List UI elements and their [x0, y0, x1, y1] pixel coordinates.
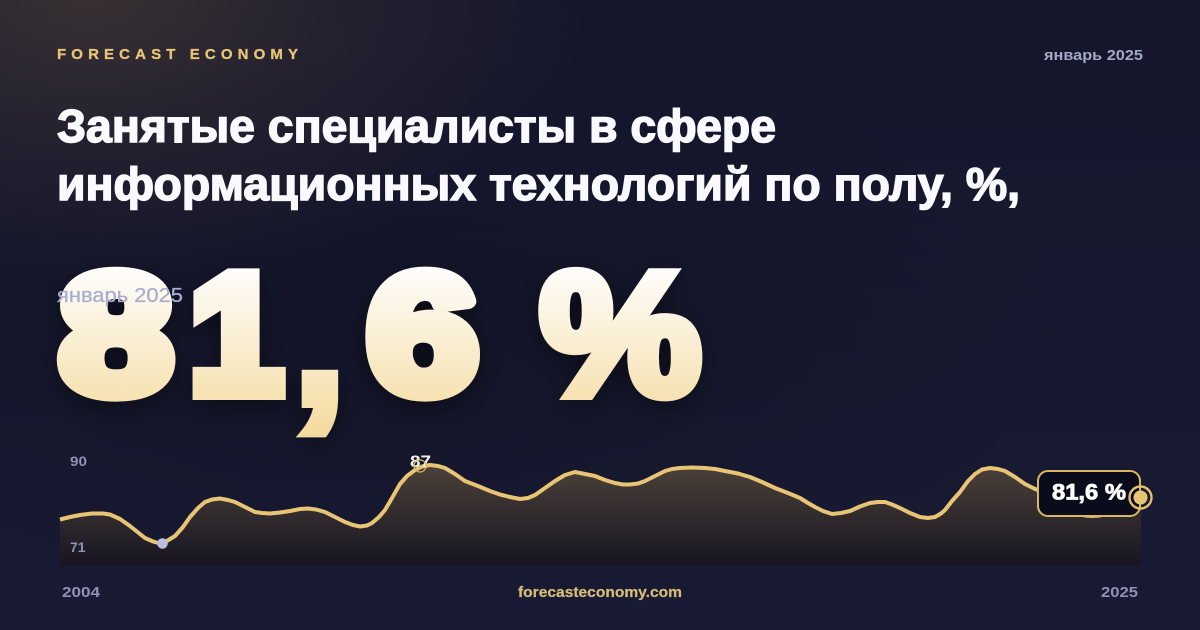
peak marker: [414, 460, 426, 472]
big value: 8: [60, 241, 172, 428]
date subtitle overlapping value: январь 2025: [57, 285, 183, 307]
chart area fill: [60, 465, 1141, 565]
current value callout: [1038, 471, 1140, 516]
big value: %: [540, 236, 701, 431]
chart line: [60, 465, 1140, 544]
big value: 6: [368, 240, 478, 428]
title: информационных технологий по полу, %,: [57, 158, 1020, 210]
axis min label: 71: [70, 540, 86, 555]
end year: 2025: [1101, 585, 1138, 601]
axis max label: 90: [70, 454, 87, 469]
big value: ,: [294, 232, 346, 444]
date top right: январь 2025: [1044, 48, 1143, 64]
title: [57, 100, 1020, 210]
peak value label: 87: [410, 453, 431, 471]
brand eyebrow: FORECAST ECONOMY: [57, 46, 298, 63]
current value marker: [1130, 486, 1152, 508]
minimum marker: [157, 538, 168, 549]
start year: 2004: [62, 585, 100, 601]
title: Занятые специалисты в сфере: [57, 100, 776, 152]
big value: [60, 232, 701, 444]
big value: 1: [190, 241, 283, 428]
source url: forecasteconomy.com: [518, 585, 682, 601]
current value callout: 81,6 %: [1052, 480, 1126, 504]
line chart: [60, 453, 1141, 565]
